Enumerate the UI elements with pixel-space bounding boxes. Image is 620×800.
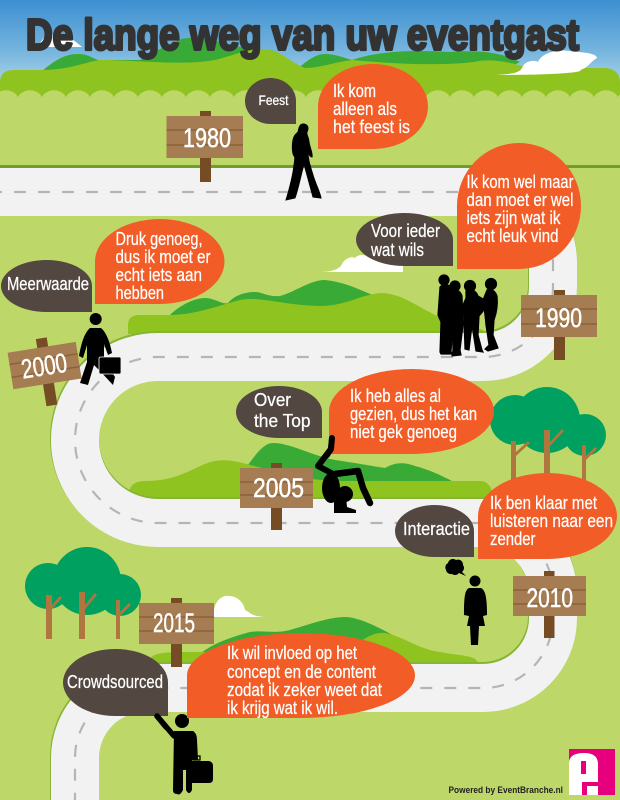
mid cloud [318, 255, 403, 272]
bubble: Ik kom alleen als het feest is: Ik kom [333, 81, 376, 101]
bubble: Meerwaarde [1, 260, 92, 312]
figure: man with briefcase 2000 [79, 313, 121, 385]
bubble: Interactie: Interactie [403, 519, 470, 539]
bubble: Over the Top [236, 386, 322, 438]
dark green distant hills [41, 38, 520, 72]
bubble: Over the Top: the Top [254, 411, 310, 431]
bubble: Ik heb alles al gezien: gezien, dus het kan [350, 404, 477, 424]
gymnast foot above bubble [327, 438, 332, 455]
bubble: Voor ieder wat wils: wat wils [370, 240, 424, 260]
bubble: Ik heb alles al gezien [329, 369, 494, 454]
bubble: Ik kom alleen als het feest is: het feest is [333, 117, 410, 137]
bubble: Ik heb alles al gezien: Ik heb alles al [350, 386, 441, 406]
bubble: Ik ben klaar met luisteren: Ik ben klaar met [490, 493, 597, 513]
credit line: Powered by EventBranche.nl [448, 785, 563, 795]
bubble: Crowdsourced [63, 649, 168, 716]
hills behind fourth road [146, 617, 478, 664]
white cloud right [496, 50, 597, 75]
bubble: Meerwaarde: Meerwaarde [7, 274, 89, 294]
raised hand of the 2015 man [157, 716, 166, 727]
bubble: Feest: Feest [258, 92, 289, 108]
bubble: Crowdsourced: Crowdsourced [67, 672, 163, 692]
sign 2010: 2010 [526, 583, 573, 613]
figure: man 2015 with suitcase [157, 714, 213, 794]
figure: gymnast 2005 [318, 438, 370, 513]
bubble: Druk genoeg [95, 219, 224, 304]
sign 2010 [513, 571, 586, 638]
figure: woman 1980 [286, 124, 321, 200]
bubble: Druk genoeg: echt iets aan [116, 265, 202, 285]
bubble: Druk genoeg: dus ik moet er [116, 247, 211, 267]
sign 1980 [166, 111, 243, 182]
bubble: Feest [245, 78, 296, 124]
sign 1980: 1980 [183, 123, 231, 153]
bubble: Ik ben klaar met luisteren [478, 473, 617, 559]
figure: group 1990 [438, 275, 498, 356]
bubble: Ik kom wel maar: Ik kom wel maar [466, 172, 574, 192]
bubble: Interactie [395, 505, 474, 557]
hills behind second road [128, 280, 490, 334]
small cloud behind title [28, 34, 82, 47]
sign 2000: 2000 [19, 348, 69, 385]
bubble: Voor ieder wat wils: Voor ieder [371, 221, 440, 241]
sign 2015 [139, 598, 214, 667]
figure: woman 2010 with thought cloud [445, 559, 487, 645]
bubble: Ik kom wel maar [457, 143, 581, 269]
bubble: Over the Top: Over [254, 390, 291, 410]
green hill band [0, 49, 620, 110]
sign 1990: 1990 [535, 303, 582, 333]
sign 2005: 2005 [253, 473, 304, 503]
sky [0, 0, 620, 100]
trees upper right [490, 387, 606, 481]
bubble: Ik kom wel maar: iets zijn wat ik [466, 208, 561, 228]
bubble: Ik wil invloed [187, 633, 415, 718]
bubble: Ik kom wel maar: echt leuk vind [466, 226, 558, 246]
bubble: Ik wil invloed: Ik wil invloed op het [227, 643, 357, 663]
bubble: Ik kom wel maar: dan moet er wel [466, 190, 574, 210]
bubble: Druk genoeg: hebben [116, 283, 164, 303]
bubble: Ik wil invloed: zodat ik zeker weet dat [227, 680, 382, 700]
hills behind third road [128, 443, 492, 500]
sign 2000 [6, 333, 85, 411]
road with centre dashes [0, 165, 620, 800]
bubble: Ik ben klaar met luisteren: zender [490, 529, 536, 549]
sign 2015: 2015 [153, 608, 195, 638]
bubble: Voor ieder wat wils [356, 213, 453, 266]
bubble: Druk genoeg: Druk genoeg, [116, 229, 202, 249]
bubble: Ik heb alles al gezien: niet gek genoeg [350, 422, 457, 442]
bubble: Ik wil invloed: ik krijg wat ik wil. [227, 698, 338, 718]
sign 1990 [521, 290, 597, 360]
bubble: Ik kom alleen als het feest is [318, 64, 428, 149]
sign 2005 [240, 463, 313, 530]
logo [569, 749, 615, 795]
lower cloud [213, 596, 265, 617]
trees lower left [25, 547, 141, 639]
bubble: Ik wil invloed: concept en de content [227, 662, 376, 682]
bubble: Ik kom alleen als het feest is: alleen als [333, 99, 397, 119]
